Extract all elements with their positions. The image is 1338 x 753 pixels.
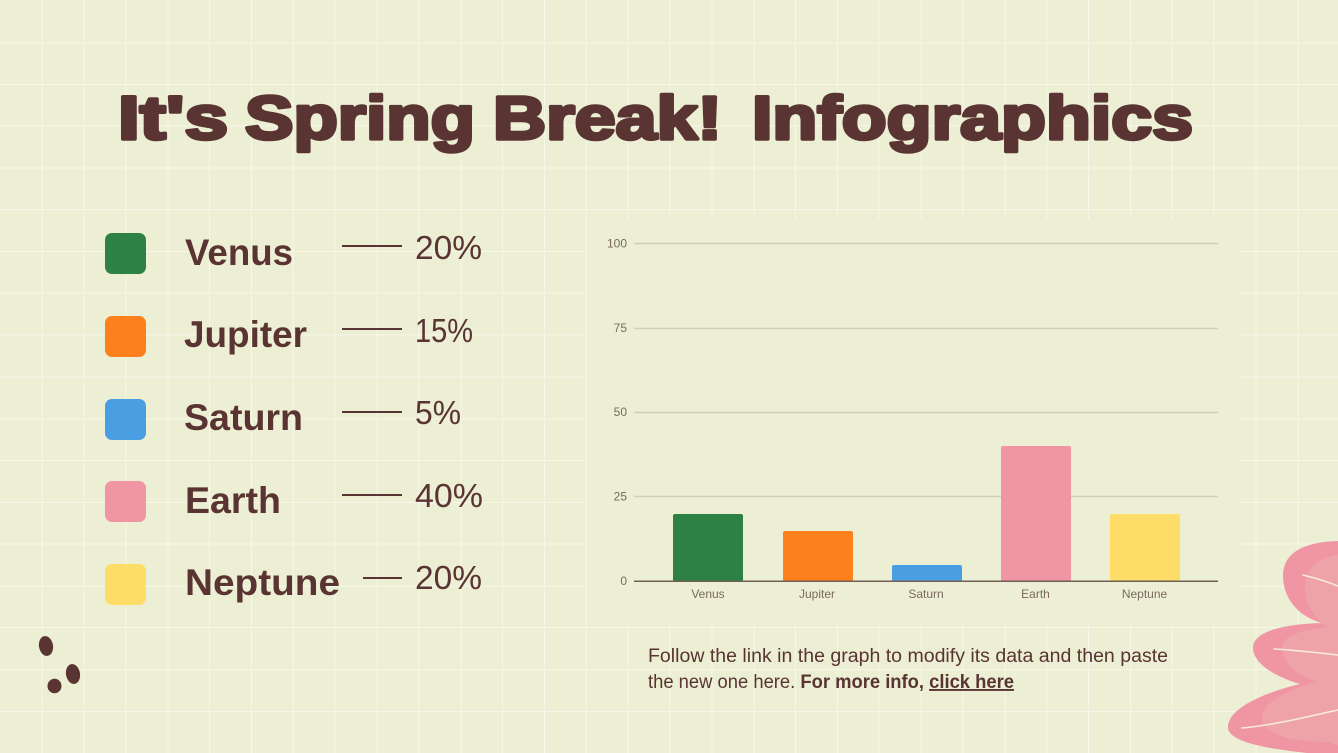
- legend row: Earth: Earth: [185, 480, 281, 521]
- title: Break!: [493, 84, 722, 152]
- title: Infographics: [752, 84, 1193, 152]
- legend row: Venus: Venus: [185, 232, 293, 273]
- body text: the new one here. For more info, click here: [648, 672, 1014, 693]
- y axis labels: 75: [614, 321, 627, 335]
- title: Spring: [245, 84, 475, 152]
- x axis labels: Jupiter: [799, 587, 835, 601]
- legend row: Neptune: 20%: [415, 559, 482, 596]
- icon: pink leaf: [1228, 541, 1338, 753]
- body text: Follow the link in the graph to modify its data and then paste: [648, 646, 1168, 667]
- x axis labels: [691, 587, 1168, 601]
- legend row: Saturn: Saturn: [184, 397, 303, 438]
- legend row: Neptune: [105, 559, 482, 605]
- legend row: Jupiter: 15%: [415, 312, 473, 349]
- legend row: Saturn: [105, 394, 461, 440]
- x axis labels: Venus: [691, 587, 725, 601]
- y axis labels: [607, 236, 627, 588]
- body text: [648, 646, 1168, 693]
- legend row: Jupiter: Jupiter: [184, 314, 307, 355]
- icon: seeds: [37, 635, 82, 693]
- bars: [673, 446, 1180, 582]
- title: [118, 84, 1193, 152]
- y axis labels: 100: [607, 236, 627, 250]
- x axis labels: Earth: [1021, 587, 1050, 601]
- y axis labels: 0: [620, 574, 627, 588]
- bar chart: [587, 219, 1238, 622]
- x axis labels: Neptune: [1122, 587, 1168, 601]
- legend: [105, 229, 483, 605]
- y axis labels: 50: [614, 405, 627, 419]
- y axis labels: 25: [614, 490, 627, 504]
- title: It's: [118, 84, 228, 152]
- legend row: Venus: [105, 229, 482, 274]
- legend row: Jupiter: [105, 312, 473, 357]
- legend row: Earth: 40%: [415, 477, 483, 514]
- legend row: Venus: 20%: [415, 229, 482, 266]
- x axis labels: Saturn: [908, 587, 944, 601]
- legend row: Saturn: 5%: [415, 394, 461, 431]
- legend row: Neptune: Neptune: [185, 562, 340, 603]
- legend row: Earth: [105, 477, 483, 522]
